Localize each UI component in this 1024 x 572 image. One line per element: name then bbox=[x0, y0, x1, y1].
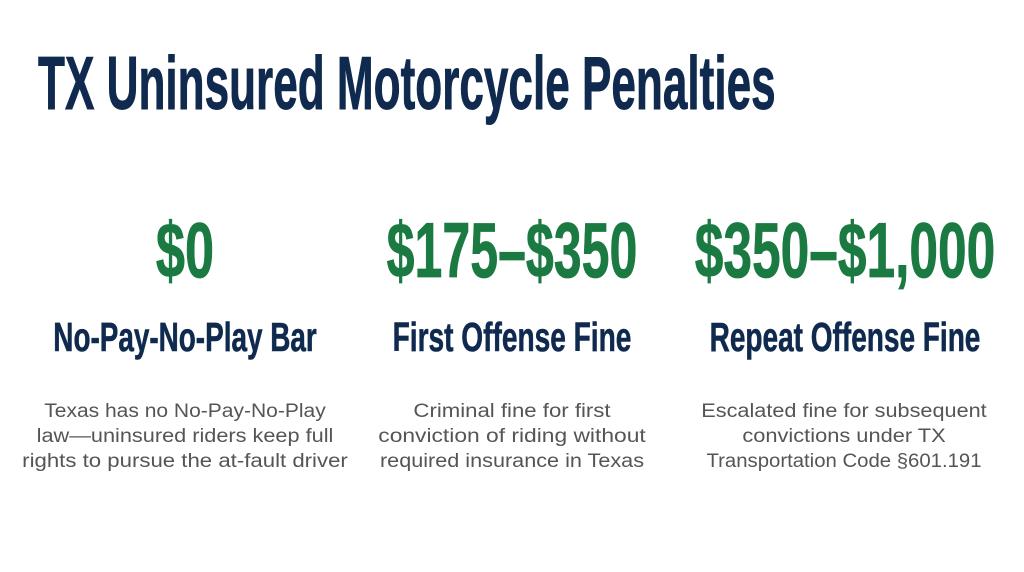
stat: repeat offense value: $350–$1,000 bbox=[695, 206, 995, 294]
text: repeat offense description: Escalated fine for subsequent bbox=[701, 401, 987, 422]
text: no-pay-no-play description bbox=[22, 401, 348, 472]
text: no-pay-no-play description: law—uninsured riders keep full bbox=[37, 426, 333, 447]
heading: repeat offense: Repeat Offense Fine bbox=[710, 314, 980, 360]
text: repeat offense description: convictions under TX bbox=[742, 426, 946, 447]
heading: no-pay-no-play: No-Pay-No-Play Bar bbox=[53, 314, 317, 360]
text: no-pay-no-play description: rights to pursue the at-fault driver bbox=[22, 451, 348, 472]
stat: first offense value: $175–$350 bbox=[387, 206, 637, 294]
text: first offense description: Criminal fine for first bbox=[413, 401, 611, 422]
text: no-pay-no-play description: Texas has no No-Pay-No-Play bbox=[44, 401, 326, 422]
title: TX Uninsured Motorcycle Penalties bbox=[38, 41, 776, 125]
text: first offense description: conviction of riding without bbox=[378, 426, 646, 447]
text: repeat offense description: Transportation Code §601.191 bbox=[706, 451, 982, 472]
text: first offense description bbox=[378, 401, 646, 472]
heading: first offense: First Offense Fine bbox=[393, 314, 631, 360]
text: first offense description: required insurance in Texas bbox=[380, 451, 644, 472]
stat: no-pay-no-play value: $0 bbox=[156, 206, 214, 294]
text: repeat offense description bbox=[701, 401, 987, 472]
